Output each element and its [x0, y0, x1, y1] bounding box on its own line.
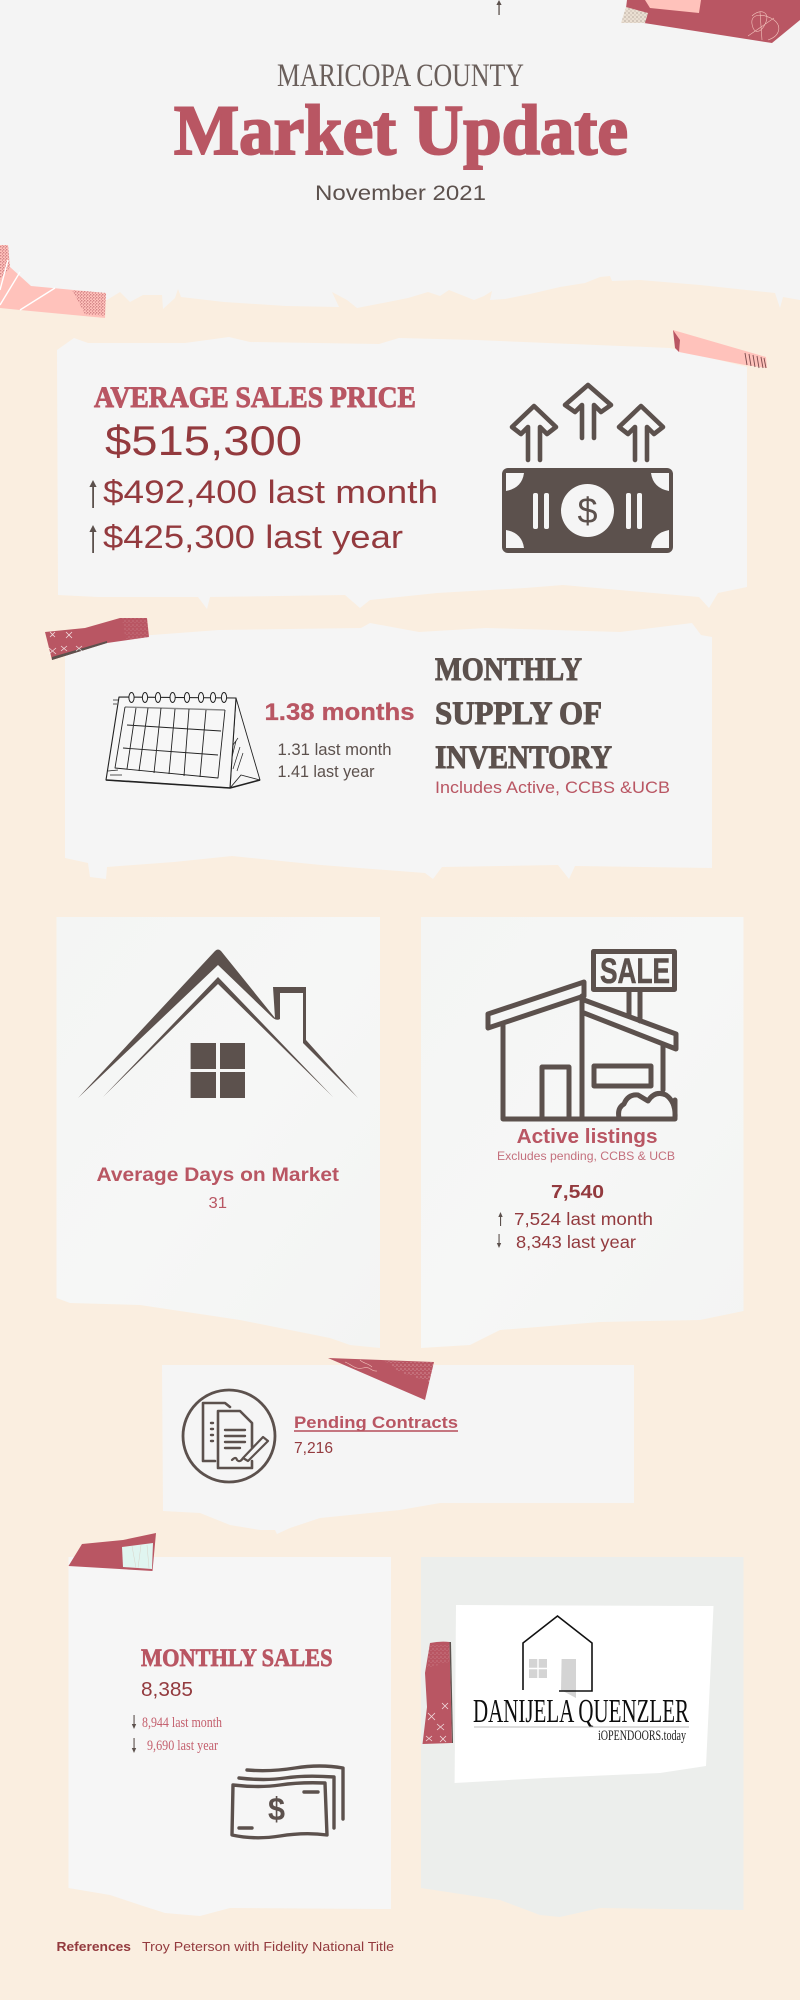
header panel	[0, 0, 800, 309]
panel: monthly sales	[68, 1557, 391, 1916]
icon: money with rising arrows	[502, 385, 673, 553]
value: current price: $515,300	[105, 417, 302, 464]
arrow: up	[498, 1212, 503, 1226]
title: Maricopa County: MARICOPA COUNTY	[277, 58, 524, 94]
panel: pending contracts	[162, 1365, 634, 1534]
value: pending contracts: 7,216	[294, 1440, 333, 1457]
tape: panel two left	[45, 618, 149, 660]
panel: average sales price	[57, 337, 747, 609]
text: last year supply: 1.41 last year	[278, 763, 375, 781]
panel: logo background	[421, 1557, 744, 1917]
logo card	[455, 1605, 714, 1783]
text: last month price: $492,400 last month	[103, 474, 438, 510]
value: active listings: 7,540	[551, 1182, 604, 1202]
icon: house roof with window	[78, 950, 358, 1098]
arrow: last year up	[89, 525, 97, 553]
heading: monthly supply of inventory: MONTHLY	[435, 652, 582, 688]
note: excludes pending: Excludes pending, CCBS & UCB	[497, 1149, 675, 1163]
logo: website: iOPENDOORS.today	[598, 1728, 686, 1744]
value: monthly sales: 8,385	[141, 1679, 193, 1701]
heading: monthly supply of inventory: SUPPLY OF	[435, 696, 602, 732]
subtitle: date: November 2021	[315, 182, 486, 205]
icon: signed document	[183, 1390, 275, 1482]
tape: monthly sales	[68, 1533, 156, 1571]
icon: house with sale sign: SALE	[600, 952, 670, 991]
heading: monthly supply of inventory: INVENTORY	[435, 740, 612, 776]
note: includes active: Includes Active, CCBS &UCB	[435, 779, 670, 797]
arrow: down	[132, 1715, 136, 1729]
icon: desk calendar	[106, 692, 260, 788]
tape: top right	[621, 0, 800, 43]
tape: panel one right	[673, 330, 767, 368]
heading: monthly supply of inventory	[435, 652, 612, 776]
label: average days on market: Average Days on Market	[96, 1165, 340, 1186]
label: pending contracts: Pending Contracts	[294, 1413, 458, 1432]
value: months of supply: 1.38 months	[264, 699, 414, 726]
value: days: 31	[208, 1195, 227, 1212]
icon: stack of bills: $	[268, 1791, 285, 1827]
icon: house with sale sign	[488, 952, 676, 1119]
icon: stack of bills	[232, 1766, 343, 1838]
references: Troy Peterson with Fidelity National Title	[142, 1939, 394, 1954]
text: last year listings: 8,343 last year	[516, 1232, 636, 1252]
references	[56, 1939, 394, 1954]
label: active listings: Active listings	[517, 1126, 658, 1148]
heading: average sales price: AVERAGE SALES PRICE	[94, 381, 416, 414]
heading: monthly sales: MONTHLY SALES	[141, 1645, 332, 1672]
arrow: last month up	[89, 480, 97, 508]
tape: pending contracts	[328, 1358, 434, 1400]
panel: active listings	[421, 917, 744, 1348]
tape: logo	[422, 1642, 453, 1744]
icon: small top arrow	[496, 0, 502, 15]
text: last month listings: 7,524 last month	[514, 1209, 653, 1229]
text: last month sales: 8,944 last month	[142, 1715, 222, 1731]
arrow: down	[497, 1234, 501, 1248]
icon: money with rising arrows: $	[577, 490, 598, 531]
logo: house outline	[523, 1616, 592, 1698]
panel: average days on market	[56, 917, 380, 1348]
text: last year sales: 9,690 last year	[147, 1738, 218, 1754]
panel: monthly supply of inventory	[65, 623, 712, 879]
tape: header left	[0, 245, 106, 318]
references: References	[56, 1939, 131, 1954]
text: last month supply: 1.31 last month	[278, 741, 392, 759]
text: last year price: $425,300 last year	[103, 519, 403, 555]
arrow: down	[132, 1738, 136, 1753]
title: Market Update: Market Update	[174, 92, 628, 170]
